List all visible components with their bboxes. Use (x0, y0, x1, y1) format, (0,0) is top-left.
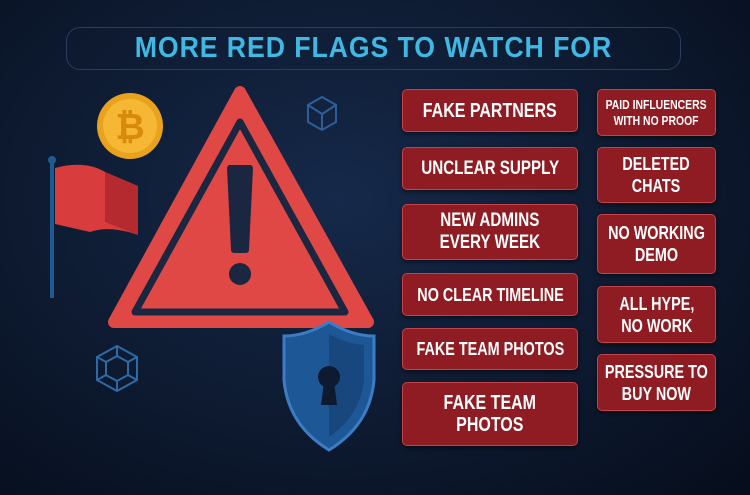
box: no working demo (597, 214, 716, 274)
box: all hype (597, 286, 716, 343)
box: paid influencers: PAID INFLUENCERS (606, 96, 707, 112)
icon: flag (48, 156, 138, 298)
box: no clear timeline (402, 273, 578, 316)
icon: hexagon bottom (97, 346, 137, 391)
box: fake team photos 2: PHOTOS (456, 414, 524, 436)
box: pressure to buy (597, 354, 716, 411)
icon: hexagon top (308, 97, 336, 130)
box: all hype: ALL HYPE, (619, 294, 694, 314)
title (66, 27, 681, 70)
box: pressure to buy: BUY NOW (622, 384, 691, 404)
box: all hype: NO WORK (621, 316, 692, 336)
icon: warning triangle (114, 92, 368, 322)
icon: bitcoin coin: ₿ (115, 106, 145, 147)
box: deleted chats: DELETED (623, 154, 690, 174)
box: no working demo: NO WORKING (608, 223, 705, 243)
title: MORE RED FLAGS TO WATCH FOR (135, 32, 612, 64)
right column boxes (596, 89, 717, 414)
box: no working demo: DEMO (635, 245, 678, 265)
box: unclear supply (402, 147, 578, 190)
box: paid influencers: WITH NO PROOF (614, 112, 699, 128)
box: fake team photos (402, 328, 578, 370)
box: fake partners: FAKE PARTNERS (423, 100, 557, 122)
box: paid influencers (597, 89, 716, 136)
box: deleted chats: CHATS (632, 176, 681, 196)
box: fake partners (402, 89, 578, 132)
box: new admins: EVERY WEEK (440, 232, 540, 253)
box: fake team photos 2 (402, 382, 578, 446)
box: no clear timeline: NO CLEAR TIMELINE (417, 284, 563, 304)
icon: shield (284, 322, 374, 450)
box: new admins: NEW ADMINS (440, 210, 540, 231)
left column boxes (400, 89, 579, 449)
illustration (48, 86, 376, 452)
box: fake team photos 2: FAKE TEAM (444, 392, 536, 414)
box: deleted chats (597, 147, 716, 203)
box: pressure to buy: PRESSURE TO (605, 362, 708, 382)
box: unclear supply: UNCLEAR SUPPLY (421, 158, 559, 178)
box: new admins (402, 204, 578, 260)
icon: bitcoin coin (97, 93, 163, 159)
box: fake team photos: FAKE TEAM PHOTOS (416, 339, 564, 359)
